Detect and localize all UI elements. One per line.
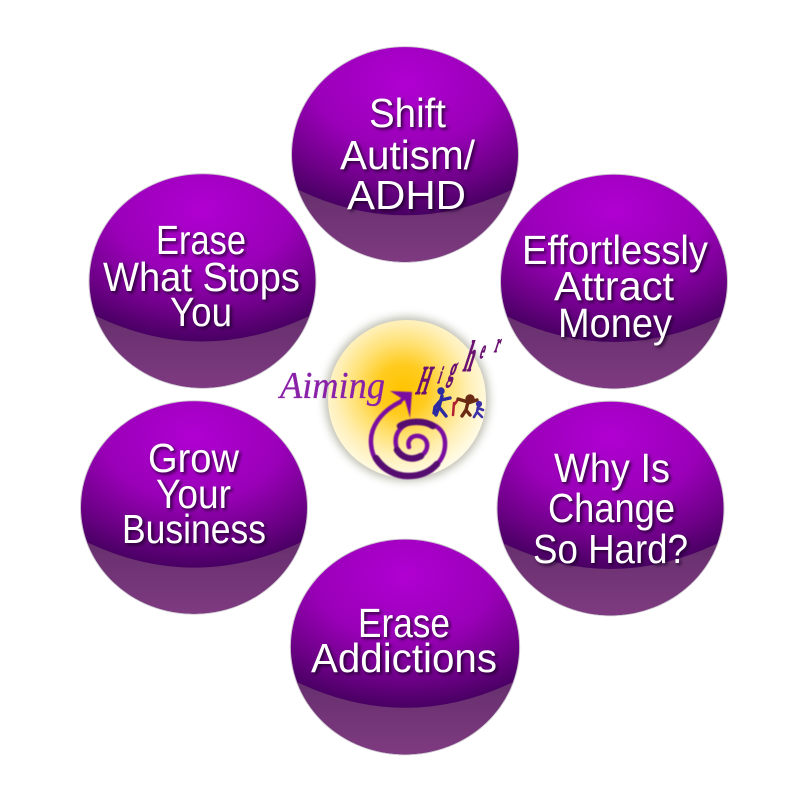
- orb: Why Is Change So Hard?: Why Is: [554, 445, 670, 491]
- central logo: Aiming Higher: [277, 317, 506, 481]
- logo spiral arrow: [371, 391, 445, 476]
- orb: Erase What Stops You: You: [170, 289, 232, 335]
- orb: Why Is Change So Hard?: [496, 400, 724, 616]
- orb: Shift Autism/ADHD: Shift: [369, 90, 447, 136]
- orb: Erase Addictions: Addictions: [311, 635, 497, 681]
- orb: Erase What Stops You: What Stops: [103, 254, 300, 300]
- orb: Shift Autism/ADHD: [291, 46, 519, 263]
- logo sun disc: [325, 317, 489, 481]
- logo word: Aiming: Aiming: [277, 365, 385, 407]
- logo dancing people: [434, 389, 483, 417]
- orb: Why Is Change So Hard?: Change: [548, 485, 675, 531]
- orb: Erase Addictions: [290, 538, 520, 756]
- orb: Effortlessly Attract Money: Attract: [554, 263, 675, 309]
- logo word: Higher: i: [435, 363, 446, 389]
- orb: Erase Addictions: Erase: [358, 600, 450, 646]
- logo word: Higher: r: [492, 328, 506, 358]
- orb: Effortlessly Attract Money: [500, 174, 728, 390]
- logo word: Higher: e: [477, 336, 490, 364]
- orb: Shift Autism/ADHD: ADHD: [347, 172, 466, 218]
- logo word: Higher: h: [459, 333, 483, 381]
- orb: Erase What Stops You: [88, 173, 316, 389]
- orb: Grow Your Business: Business: [122, 506, 266, 552]
- orb: Why Is Change So Hard?: So Hard?: [533, 526, 688, 572]
- orb: Erase What Stops You: Erase: [156, 217, 246, 263]
- orb: Grow Your Business: Grow: [148, 435, 239, 481]
- orb: Effortlessly Attract Money: Effortlessly: [522, 227, 708, 273]
- orb: Grow Your Business: [80, 400, 308, 615]
- orb: Effortlessly Attract Money: Money: [558, 300, 672, 346]
- orb: Grow Your Business: Your: [156, 471, 231, 517]
- orb: Shift Autism/ADHD: Autism/: [340, 132, 476, 178]
- logo word: Higher: g: [445, 349, 463, 388]
- logo word: Higher: H: [412, 357, 438, 403]
